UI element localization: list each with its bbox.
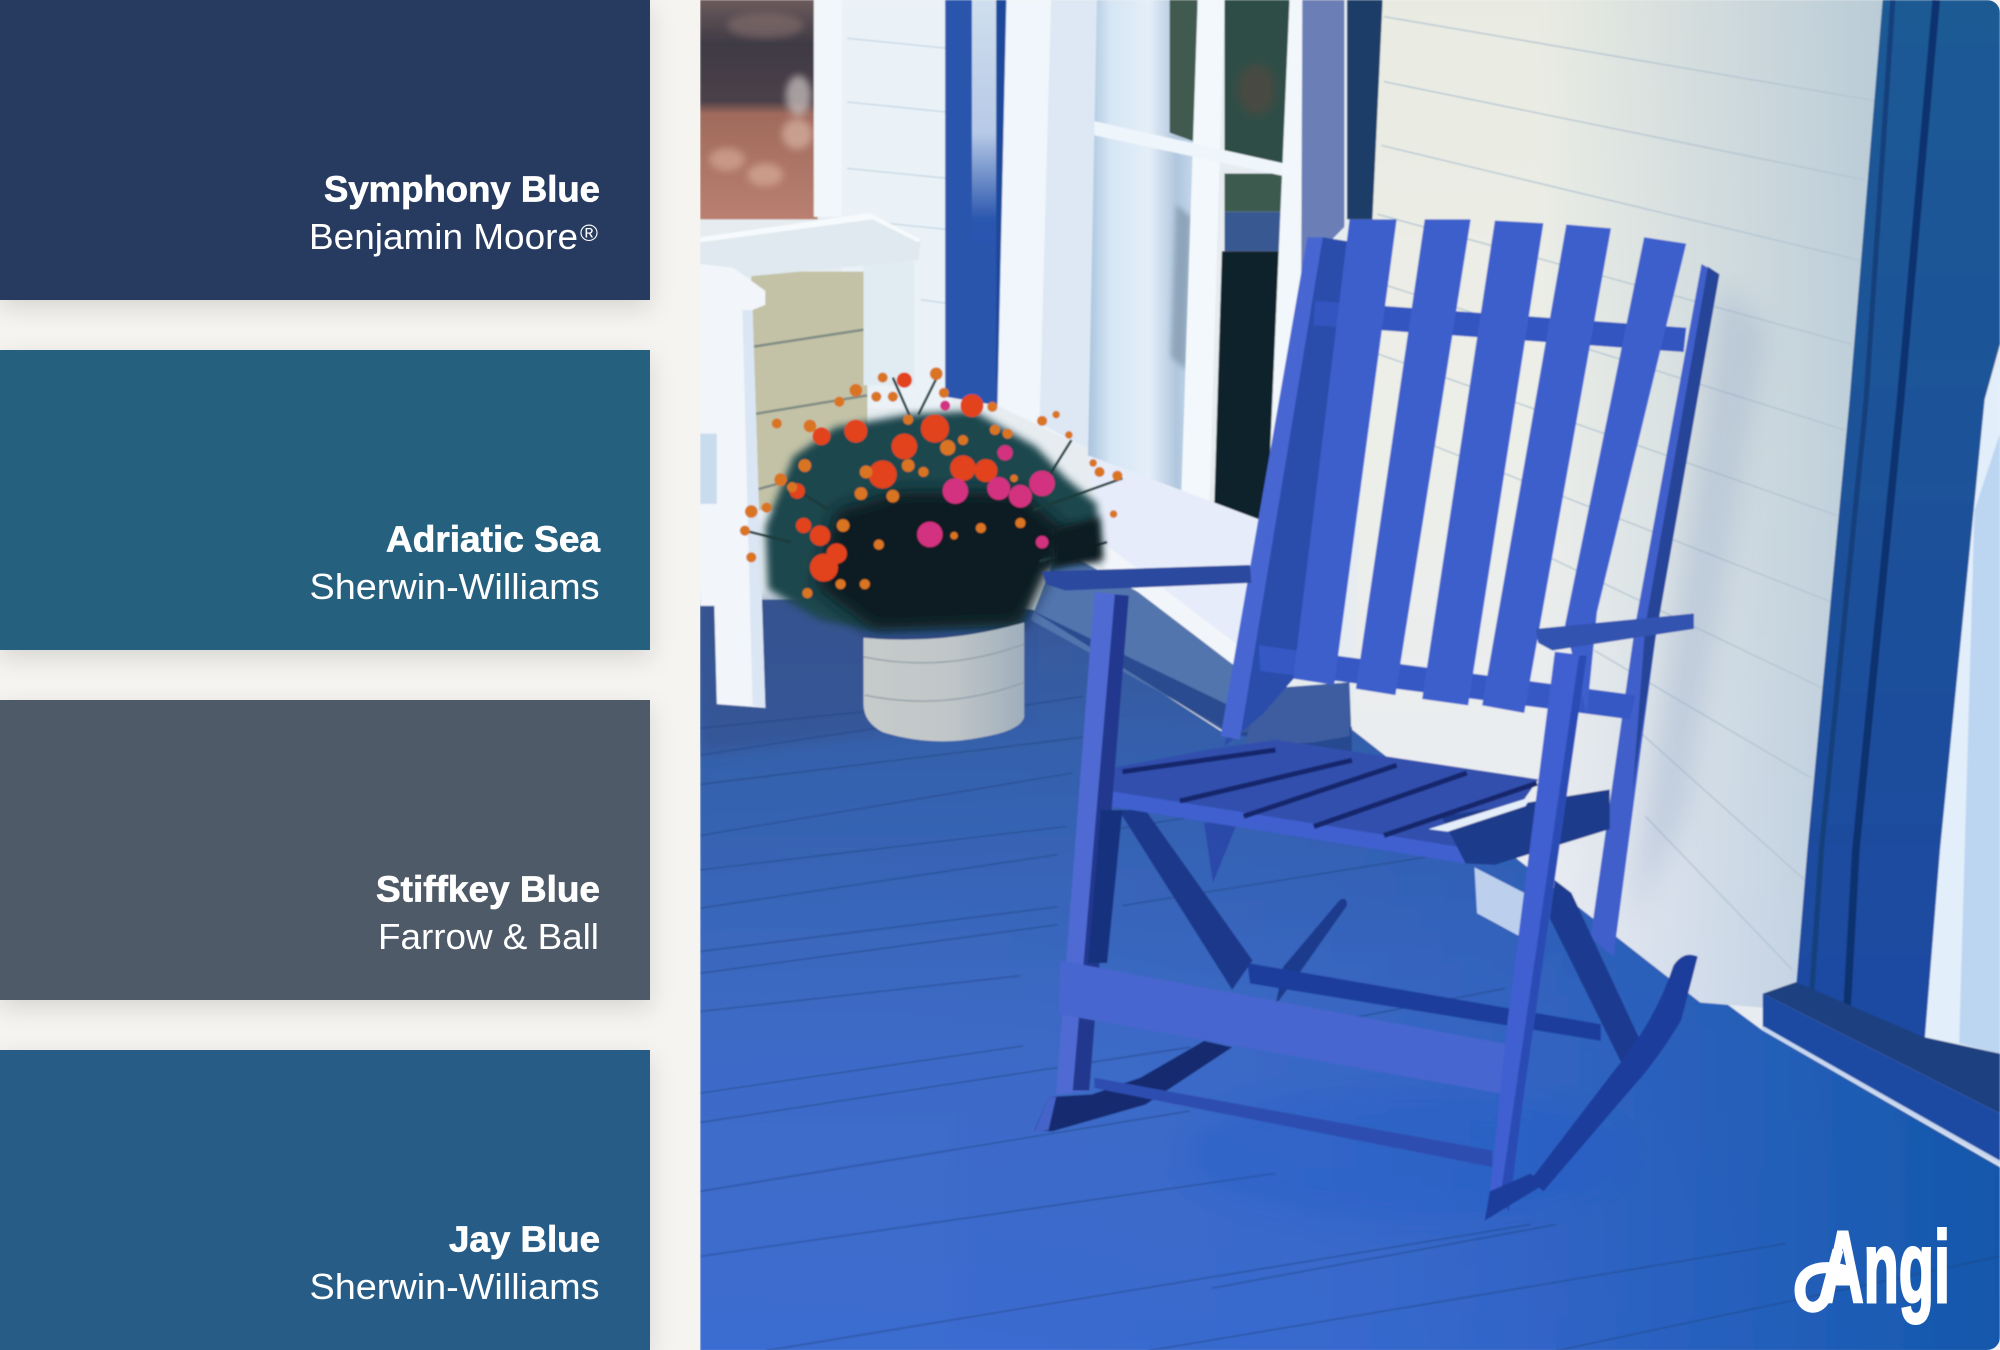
window frame and curtains xyxy=(997,0,1383,526)
brand: Farrow & Ball: Farrow & Ball xyxy=(378,916,599,957)
right arm xyxy=(1536,614,1694,651)
icon: stoneware pot xyxy=(864,622,1024,741)
porch floor xyxy=(700,599,2000,1350)
back rocker stick xyxy=(1276,899,1347,1005)
chair shadow on wall xyxy=(1636,294,1765,888)
panel: Stiffkey Blue swatch xyxy=(0,700,650,1000)
back slats xyxy=(1293,219,1686,714)
blue door frame xyxy=(945,0,1008,406)
rear post lower block xyxy=(1244,682,1349,746)
panel: Symphony Blue swatch xyxy=(0,0,650,300)
logo A loop xyxy=(1800,1250,1850,1307)
rear left upright xyxy=(1221,237,1355,746)
icon: flower bouquet in pot xyxy=(740,367,1122,741)
diagonal stretcher left xyxy=(1119,810,1253,990)
front right leg xyxy=(1485,652,1587,1221)
window sill xyxy=(1031,455,1352,753)
swatch name: Stiffkey Blue: Stiffkey Blue xyxy=(376,868,600,910)
swatch name: Adriatic Sea: Adriatic Sea xyxy=(386,518,601,560)
white column and right blue post xyxy=(1763,0,2000,1163)
pink blooms xyxy=(917,401,1055,548)
panel: Adriatic Sea swatch xyxy=(0,350,650,650)
foliage xyxy=(745,374,1122,630)
rocker front-left xyxy=(1034,1041,1232,1131)
diagonal stretcher right xyxy=(1550,880,1643,1065)
pale plinth under the seat xyxy=(1474,867,1524,939)
white siding beside door xyxy=(812,0,946,304)
rear right upright xyxy=(1591,264,1719,957)
porch railing xyxy=(700,213,921,708)
front left leg xyxy=(1056,592,1129,1094)
panel: Jay Blue swatch xyxy=(0,1050,650,1350)
small buds xyxy=(740,367,1122,598)
background garden view xyxy=(700,0,818,219)
brand: Sherwin-Williams: Sherwin-Williams xyxy=(310,566,600,607)
red blooms xyxy=(790,372,997,582)
brand: Benjamin Moore: ® xyxy=(580,220,598,246)
left arm xyxy=(1042,565,1251,591)
rocking chair xyxy=(1034,219,1719,1221)
brand: Sherwin-Williams: Sherwin-Williams xyxy=(310,1266,600,1307)
swatch name: Symphony Blue: Symphony Blue xyxy=(324,168,600,210)
front rail xyxy=(1059,960,1523,1097)
cross stretcher xyxy=(1247,963,1601,1041)
foot rail xyxy=(1094,1078,1492,1167)
wall with siding xyxy=(1352,0,1888,1008)
logo: Angi xyxy=(1800,1212,1950,1324)
seat xyxy=(1105,740,1610,865)
swatch name: Jay Blue: Jay Blue xyxy=(449,1218,600,1260)
right rocker xyxy=(1531,955,1698,1191)
brand: Benjamin Moore: Benjamin Moore xyxy=(309,216,578,257)
photo: blue rocking chair on a porch xyxy=(700,0,2000,1350)
cross rails xyxy=(1314,301,1686,352)
